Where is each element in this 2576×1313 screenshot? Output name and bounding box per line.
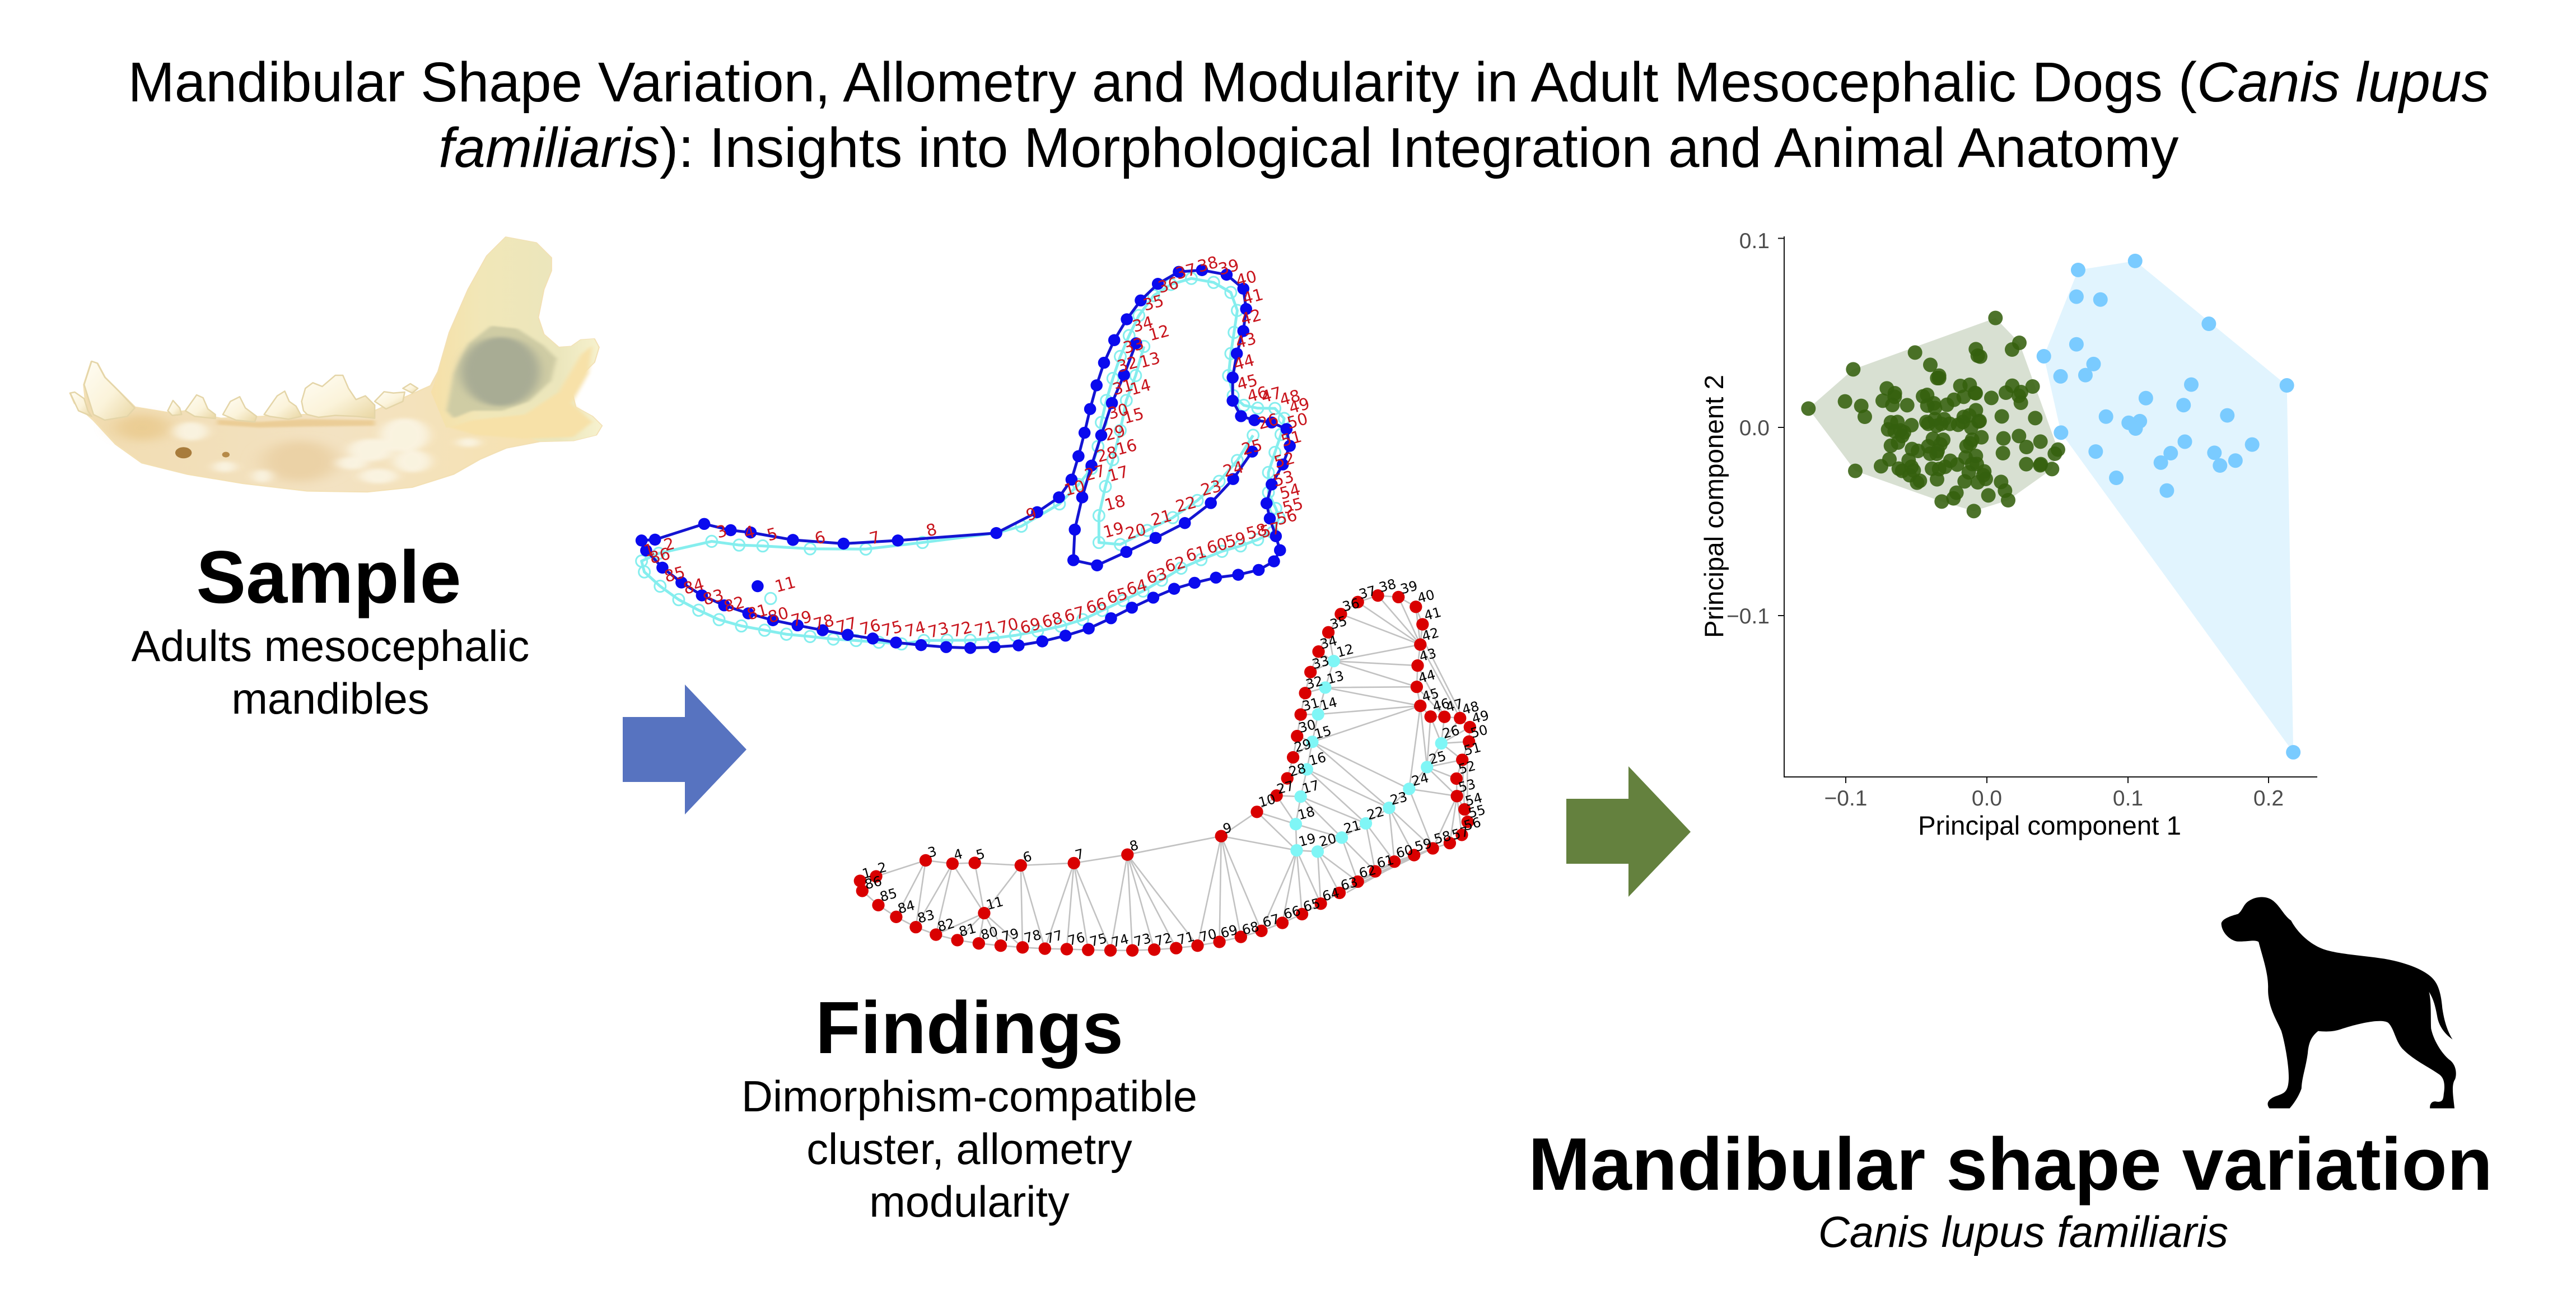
network number labels (black): 85 [878,885,899,905]
landmark number labels (red): 49 [1287,394,1312,417]
landmark number labels (red): 81 [745,600,770,624]
y tick labels [1726,229,1770,628]
heading: Mandibular shape variation: Mandibular shape variation [1528,1123,2493,1206]
landmark number labels (red) [642,252,1312,642]
landmark number labels (red): 59 [1223,528,1248,552]
landmark number labels (red): 27 [1082,461,1107,485]
landmark number labels (red): 29 [1103,421,1127,445]
network number labels (black): 56 [1462,814,1483,834]
network number labels (black): 28 [1287,760,1308,780]
landmark number labels (red): 61 [1184,542,1208,566]
title: Mandibular Shape Variation, Allometry and Modularity in Adult Mesocephalic Dogs (Canis lupus [128,51,2490,114]
network number labels (black): 47 [1444,696,1465,715]
x tick labels: −0.1 [1824,786,1867,811]
cyan landmark outline [636,273,1290,650]
landmark number labels (red): 52 [1272,448,1297,472]
y tick labels: 0.1 [1739,229,1770,253]
network number labels (black): 39 [1399,578,1419,597]
landmark number labels (red): 35 [1141,291,1166,315]
network number labels (black): 37 [1357,583,1378,602]
title: familiaris): Insights into Morphological Integration and Animal Anatomy [438,117,2179,179]
network number labels (black): 72 [1153,930,1174,949]
landmark number labels (red): 19 [1101,518,1126,542]
landmark number labels (red): 20 [1123,519,1148,543]
landmark number labels (red): 12 [1146,321,1172,344]
network number labels (black): 4 [952,846,964,863]
landmark number labels (red): 76 [858,615,883,639]
network number labels (black): 34 [1318,633,1339,653]
network number labels (black): 2 [876,859,888,877]
network number labels (black): 71 [1175,929,1196,948]
landmark number labels (red): 80 [766,603,791,627]
landmark number labels (red): 7 [867,527,882,548]
network number labels (black): 65 [1301,895,1322,915]
x tick labels: 0.2 [2253,786,2284,811]
landmark number labels (red): 65 [1105,584,1130,608]
network number labels (black): 23 [1388,789,1409,808]
network number labels (black): 77 [1044,927,1065,947]
text: findings description: cluster, allometry [806,1125,1132,1174]
network number labels (black): 68 [1240,919,1261,938]
network number labels (black): 75 [1088,930,1109,950]
landmark number labels (red): 6 [813,527,828,548]
network number labels (black): 22 [1365,803,1386,823]
landmark number labels (red): 10 [1062,476,1087,500]
points: green cluster [1801,311,2065,518]
landmark number labels (red): 64 [1124,575,1149,599]
text: findings description: modularity [869,1178,1070,1226]
landmark number labels (red): 71 [972,617,997,640]
landmark number labels (red): 5 [765,524,780,545]
network number labels (black): 83 [916,907,936,926]
landmark number labels (red): 38 [1195,252,1220,276]
landmark number labels (red): 44 [1231,350,1257,374]
network number labels (black): 38 [1377,576,1398,595]
landmark number labels (red): 22 [1174,492,1198,516]
network number labels (black): 13 [1325,668,1346,687]
icon: dog silhouette [2222,897,2456,1109]
chart: landmark outlines [636,252,1312,654]
network number labels (black): 48 [1460,699,1481,718]
network number labels (black): 14 [1318,694,1339,714]
x tick labels: 0.0 [1972,786,2002,811]
network number labels (black): 62 [1357,862,1378,881]
network number labels (black) [861,576,1491,951]
network number labels (black): 58 [1432,828,1453,848]
network number labels (black): 44 [1417,667,1437,686]
blue landmark outline [636,264,1296,654]
network number labels (black): 35 [1328,613,1349,632]
landmark number labels (red): 23 [1198,476,1224,500]
landmark number labels (red): 45 [1235,370,1259,394]
network number labels (black): 31 [1300,695,1321,714]
landmark number labels (red): 83 [701,585,726,609]
landmark number labels (red): 14 [1128,375,1153,399]
landmark number labels (red): 74 [903,617,928,641]
landmark number labels (red): 79 [789,607,814,630]
network number labels (black): 51 [1462,739,1483,759]
landmark number labels (red): 54 [1277,479,1303,503]
landmark number labels (red): 31 [1110,375,1135,399]
heading: Findings: Findings [815,986,1123,1069]
landmark number labels (red): 60 [1205,534,1230,557]
network number labels (black): 79 [1000,925,1021,945]
landmark number labels (red): 77 [834,613,859,637]
network number labels (black): 11 [984,893,1005,913]
landmark number labels (red): 75 [880,617,904,640]
landmark number labels (red): 13 [1137,348,1162,372]
text: sample description [132,622,529,723]
points: blue cluster [2037,254,2300,760]
landmark number labels (red): 78 [811,611,836,634]
landmark number labels (red): 85 [662,562,687,586]
x tick labels: 0.1 [2113,786,2143,811]
network number labels (black): 74 [1110,931,1131,951]
network number labels (black): 78 [1023,927,1043,947]
network number labels (black): 43 [1417,645,1438,665]
network number labels (black): 26 [1441,722,1461,742]
network number labels (black): 76 [1066,929,1087,949]
landmark number labels (red): 46 [1245,383,1270,406]
arrow: blue [623,685,746,814]
network number labels (black): 9 [1221,820,1234,837]
network number labels (black): 45 [1420,685,1441,705]
network number labels (black): 81 [957,920,978,940]
title [128,51,2490,179]
network number labels (black): 24 [1410,770,1430,789]
network number labels (black): 80 [979,924,1000,943]
network number labels (black): 3 [926,844,939,861]
network number labels (black): 84 [896,897,917,917]
landmark number labels (red): 63 [1144,564,1169,588]
icon: mandible photo illustration [70,237,601,492]
network number labels (black): 46 [1431,695,1452,715]
text: findings description: Dimorphism-compatible [741,1073,1197,1121]
network number labels (black): 19 [1297,830,1318,850]
landmark number labels (red): 70 [996,614,1020,637]
network number labels (black): 41 [1422,604,1443,624]
landmark number labels (red): 47 [1259,383,1284,407]
network number labels (black): 86 [863,873,884,893]
landmark number labels (red): 25 [1239,435,1264,459]
network number labels (black): 60 [1394,842,1415,862]
landmark number labels (red): 26 [1256,409,1281,433]
landmark number labels (red): 62 [1163,552,1188,576]
network number labels (black): 50 [1469,722,1490,741]
landmark number labels (red): 42 [1239,305,1263,329]
network number labels (black): 21 [1342,817,1362,837]
landmark number labels (red): 21 [1149,506,1174,529]
network number labels (black): 7 [1074,846,1086,863]
network number labels (black): 6 [1021,849,1033,866]
landmark number labels (red): 2 [662,534,676,555]
x axis label: Principal component 1 [1918,811,2181,841]
network number labels (black): 69 [1219,922,1239,942]
landmark number labels (red): 1 [642,539,656,561]
landmark number labels (red): 48 [1277,386,1303,409]
landmark number labels (red): 24 [1221,457,1246,481]
network number labels (black): 55 [1467,802,1487,821]
landmark number labels (red): 28 [1095,443,1119,466]
landmark number labels (red): 11 [773,572,797,596]
landmark number labels (red): 40 [1234,267,1259,290]
landmark number labels (red): 17 [1105,462,1131,486]
landmark number labels (red): 67 [1062,602,1087,626]
landmark number labels (red): 82 [722,593,746,616]
landmark number labels (red): 50 [1285,409,1310,432]
network number labels (black): 32 [1304,673,1324,692]
landmark number labels (red): 57 [1258,518,1283,542]
network number labels (black): 27 [1275,778,1296,797]
landmark number labels (red): 72 [949,617,974,641]
landmark number labels (red): 68 [1040,608,1065,632]
landmark number labels (red): 33 [1121,334,1146,357]
landmark number labels (red): 41 [1240,285,1265,308]
landmark number labels (red): 15 [1121,404,1146,427]
hull: blue cluster [2044,261,2293,752]
landmark number labels (red): 34 [1130,313,1155,336]
landmark number labels (red): 8 [924,519,939,541]
network number labels (black): 61 [1375,852,1396,872]
hull: green cluster [1808,318,2058,511]
heading: Sample: Sample [196,536,461,619]
landmark number labels (red): 73 [926,618,951,642]
landmark number labels (red): 16 [1114,435,1139,459]
y tick labels: −0.1 [1726,604,1770,628]
landmark number labels (red): 9 [1024,504,1039,525]
network number labels (black): 59 [1413,835,1434,855]
network number labels (black): 82 [936,915,956,935]
axes and ticks [1778,236,2317,783]
y tick labels: 0.0 [1739,416,1770,440]
network number labels (black): 52 [1457,758,1477,777]
landmark number labels (red): 69 [1018,614,1043,637]
network number labels (black): 64 [1320,885,1341,905]
network number labels (black): 8 [1128,837,1140,854]
landmark number labels (red): 32 [1115,352,1140,376]
chart: modularity network [854,576,1491,957]
network number labels (black): 67 [1261,911,1281,930]
text: sample description: mandibles [231,675,430,723]
landmark number labels (red): 43 [1233,329,1258,352]
network number labels (black): 63 [1339,874,1360,893]
text: species name: Canis lupus familiaris [1818,1208,2228,1256]
landmark number labels (red): 58 [1244,519,1269,543]
network number labels (black): 70 [1198,926,1219,946]
network number labels (black): 12 [1335,641,1355,660]
landmark number labels (red): 66 [1084,594,1109,618]
landmark number labels (red): 84 [682,574,706,598]
network number labels (black): 40 [1416,586,1436,606]
network number labels (black): 18 [1296,803,1317,823]
network number labels (black): 57 [1450,823,1471,843]
network number labels (black): 33 [1310,653,1331,672]
network number labels (black): 49 [1470,707,1491,727]
landmark number labels (red): 36 [1156,273,1180,297]
landmark number labels (red): 55 [1280,494,1305,518]
network number labels (black): 15 [1313,723,1333,742]
chart: PCA scatter plot [1700,229,2317,841]
network number labels (black): 29 [1292,736,1313,756]
x tick labels [1824,786,2284,811]
network number labels (black): 54 [1463,790,1484,809]
network number labels (black): 66 [1282,903,1303,923]
network edges [860,595,1470,951]
network number labels (black): 5 [974,846,987,863]
network number labels (black): 1 [861,865,872,882]
network number labels (black): 73 [1132,930,1153,950]
landmark number labels (red): 37 [1174,259,1198,283]
landmark number labels (red): 51 [1279,427,1304,450]
y axis label: Principal component 2 [1700,375,1729,638]
network number labels (black): 42 [1420,625,1441,644]
landmark number labels (red): 56 [1274,505,1299,529]
text: sample description: Adults mesocephalic [132,622,529,671]
network number labels (black): 30 [1297,716,1318,736]
arrow: green [1566,766,1691,897]
network number labels (black): 17 [1300,777,1321,797]
landmark number labels (red): 4 [742,522,757,543]
network number labels (black): 16 [1307,749,1328,769]
network inner nodes (cyan) [1290,655,1448,858]
network number labels (black): 20 [1318,830,1338,850]
landmark number labels (red): 39 [1216,255,1241,279]
network number labels (black): 53 [1457,776,1477,795]
landmark number labels (red): 53 [1271,467,1296,490]
landmark number labels (red): 86 [647,544,672,567]
landmark number labels (red): 18 [1103,491,1127,515]
text: findings description [741,1073,1197,1226]
network number labels (black): 25 [1427,748,1448,767]
network number labels (black): 10 [1257,791,1277,811]
network outer nodes (red) [854,589,1476,957]
landmark number labels (red): 3 [714,521,729,542]
network number labels (black): 36 [1341,595,1361,615]
landmark number labels (red): 30 [1105,399,1131,423]
